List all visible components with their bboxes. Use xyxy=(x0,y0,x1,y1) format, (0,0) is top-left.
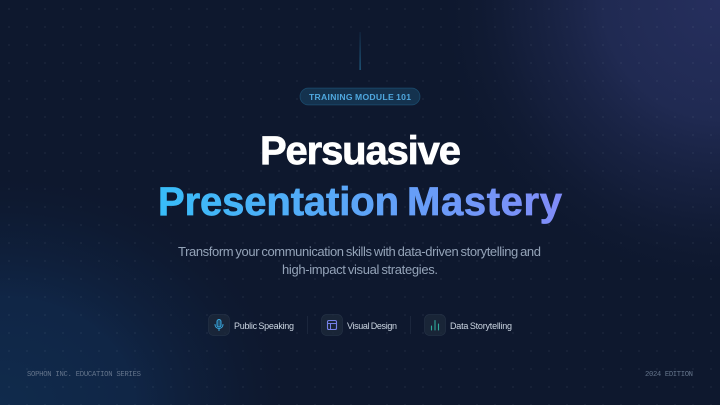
topic list xyxy=(208,314,512,336)
title xyxy=(158,129,563,224)
topic: public speaking xyxy=(208,314,294,336)
footer right: 2024 EDITION xyxy=(645,371,693,379)
accent vertical line xyxy=(360,32,361,70)
topic: visual design xyxy=(322,314,397,336)
subtitle xyxy=(178,244,541,277)
badge: training module xyxy=(300,88,420,105)
subtitle: high-impact visual strategies. xyxy=(282,262,438,277)
footer left: SOPHON INC. EDUCATION SERIES xyxy=(27,371,141,379)
title: Presentation xyxy=(158,180,399,224)
title: Mastery xyxy=(407,180,563,224)
title: Persuasive xyxy=(260,129,461,173)
label: data storytelling: Data Storytelling xyxy=(450,321,512,331)
badge: training module: TRAINING MODULE 101 xyxy=(309,92,411,102)
icon: layout xyxy=(322,314,342,336)
topic: data storytelling xyxy=(424,314,512,336)
icon: bar chart xyxy=(424,314,446,336)
subtitle: Transform your communication skills with data-driven storytelling and xyxy=(178,244,541,259)
label: visual design: Visual Design xyxy=(347,321,397,331)
label: public speaking: Public Speaking xyxy=(234,321,294,331)
icon: microphone xyxy=(208,314,230,336)
